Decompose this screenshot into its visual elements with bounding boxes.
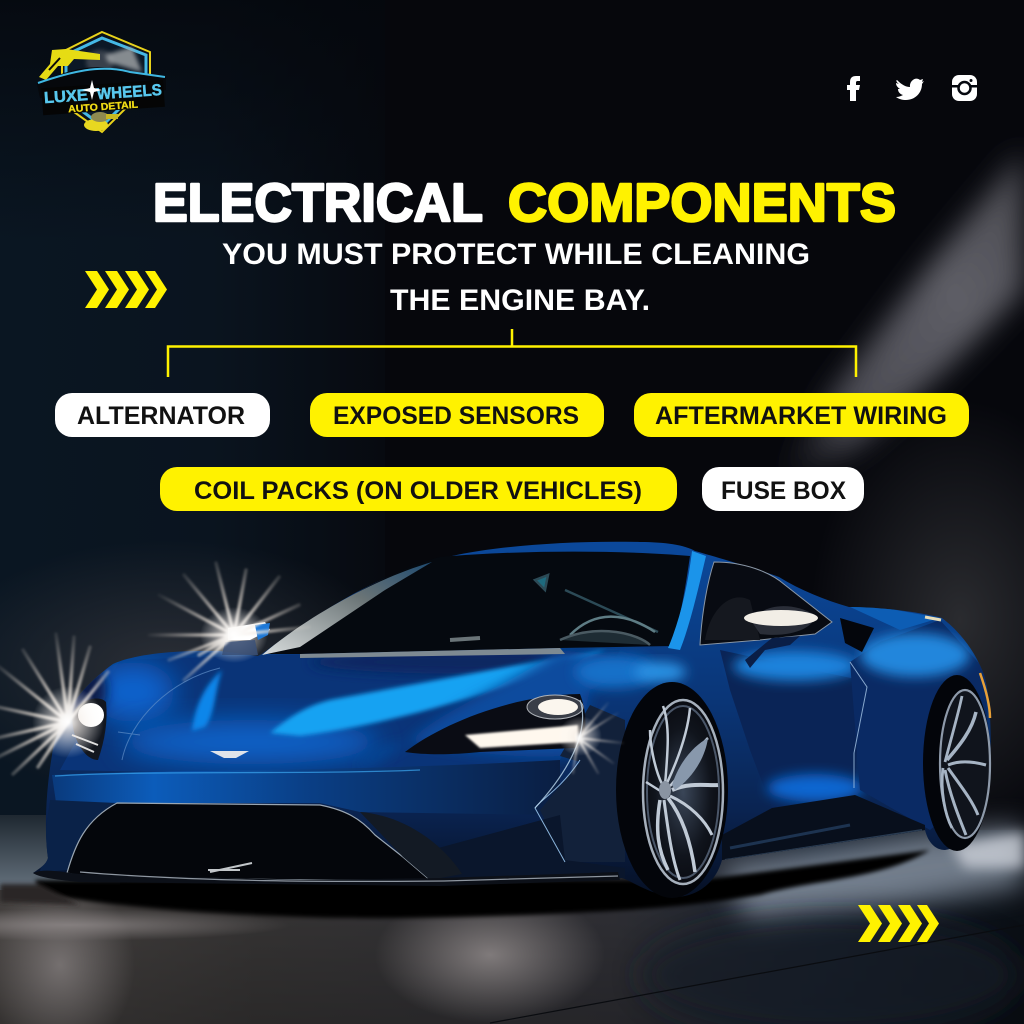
carbon side intake bbox=[360, 812, 462, 880]
logo: Luxe Wheels Auto Detail: LUXE bbox=[43, 87, 89, 107]
rear fender bbox=[850, 620, 990, 830]
sill bbox=[722, 795, 925, 862]
side marker lights bbox=[619, 673, 990, 781]
side mirror bbox=[744, 606, 818, 668]
lower front quarter bbox=[540, 705, 625, 862]
front fender highlight bbox=[374, 648, 628, 762]
arrow: chevrons bottom right bbox=[858, 905, 939, 942]
pill: coil packs bbox=[160, 467, 677, 511]
car body bbox=[20, 530, 1010, 900]
floor bbox=[0, 830, 1024, 1024]
interior bbox=[450, 575, 658, 645]
logo: Luxe Wheels Auto Detail: AUTO DETAIL bbox=[68, 100, 138, 115]
subtitle bbox=[222, 238, 810, 317]
pill: fuse box: FUSE BOX bbox=[721, 477, 846, 505]
left headlight bbox=[72, 698, 107, 760]
lower left nose bbox=[40, 800, 117, 872]
front lip bbox=[33, 871, 620, 886]
roof pillar bbox=[668, 551, 706, 650]
door panel bbox=[720, 650, 857, 773]
title: ELECTRICAL bbox=[153, 173, 483, 233]
side window bbox=[700, 562, 832, 645]
bracket connector bbox=[168, 329, 856, 377]
social icon: instagram bbox=[952, 75, 977, 101]
arrow: chevrons top left bbox=[85, 271, 167, 308]
social icon: twitter bbox=[896, 79, 924, 100]
rear roof and deck bbox=[848, 606, 940, 630]
hood shading bbox=[60, 654, 562, 772]
right headlight bbox=[405, 694, 585, 808]
pill: fuse box bbox=[702, 467, 864, 511]
logo: Luxe Wheels Auto Detail bbox=[37, 32, 166, 132]
rear wheel bbox=[923, 675, 991, 851]
light rays: starbursts bbox=[0, 563, 623, 774]
front wheel bbox=[616, 682, 728, 898]
subtitle: YOU MUST PROTECT WHILE CLEANING bbox=[222, 238, 810, 271]
pill: alternator bbox=[55, 393, 270, 437]
title bbox=[153, 173, 896, 233]
logo: Luxe Wheels Auto Detail: WHEELS bbox=[96, 82, 163, 103]
pill: coil packs: COIL PACKS (ON OLDER VEHICLES) bbox=[194, 477, 642, 505]
rear scoop bbox=[840, 618, 874, 652]
windshield glass bbox=[268, 552, 690, 654]
bumper band bbox=[52, 760, 560, 814]
hood seam lines bbox=[118, 668, 220, 760]
hood emblem bbox=[210, 751, 249, 758]
pill: aftermarket wiring: AFTERMARKET WIRING bbox=[655, 402, 947, 430]
glow: lamps bbox=[32, 607, 602, 758]
windshield pillar reflection bbox=[262, 562, 432, 655]
title: COMPONENTS bbox=[508, 173, 896, 233]
pill: alternator: ALTERNATOR bbox=[77, 402, 245, 430]
grille bbox=[67, 803, 430, 880]
door shut line bbox=[850, 662, 867, 788]
car shadow bbox=[35, 850, 930, 918]
grille badge bbox=[208, 863, 252, 872]
social icon: facebook bbox=[847, 76, 860, 101]
illustration: blue sports car bbox=[0, 530, 1010, 900]
pill: aftermarket wiring bbox=[634, 393, 969, 437]
pill: exposed sensors: EXPOSED SENSORS bbox=[333, 402, 579, 430]
subtitle: THE ENGINE BAY. bbox=[390, 284, 650, 317]
pill: exposed sensors bbox=[310, 393, 604, 437]
